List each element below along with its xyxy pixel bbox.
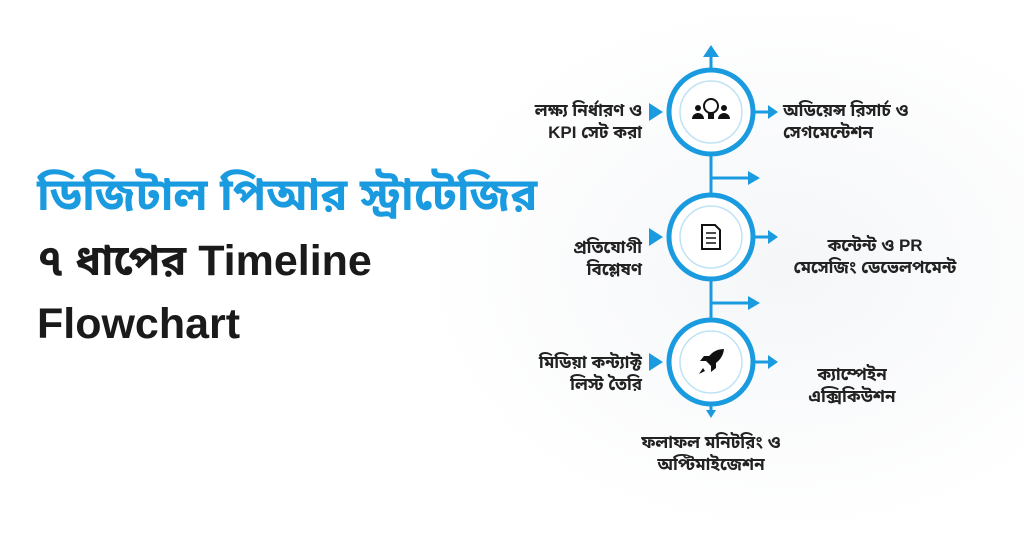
title <box>36 168 538 348</box>
label: goals: লক্ষ্য নির্ধারণ ও <box>535 101 642 120</box>
label: monitoring: অপ্টিমাইজেশন <box>657 455 765 474</box>
label: audience: অডিয়েন্স রিসার্চ ও <box>783 101 909 120</box>
circle 2 <box>669 195 753 279</box>
label: competitor: প্রতিযোগী <box>573 238 642 257</box>
label: competitor <box>573 237 642 279</box>
circle 3 <box>669 320 753 404</box>
label: media list: লিস্ট তৈরি <box>570 375 642 394</box>
label: monitoring: ফলাফল মনিটরিং ও <box>641 433 781 452</box>
background glow <box>420 0 1024 536</box>
label: audience: সেগমেন্টেশন <box>783 123 873 142</box>
label: goals: KPI সেট করা <box>548 123 642 142</box>
label: execution: ক্যাম্পেইন <box>817 365 887 384</box>
label: content <box>794 235 957 277</box>
circle 1 <box>669 70 753 154</box>
label: goals <box>534 100 642 142</box>
label: competitor: বিশ্লেষণ <box>587 260 642 279</box>
label: media list: মিডিয়া কন্ট্যাক্ট <box>539 353 642 372</box>
title: ডিজিটাল পিআর স্ট্রাটেজির <box>37 169 537 220</box>
label: content: কন্টেন্ট ও PR <box>827 236 923 255</box>
label: execution: এক্সিকিউশন <box>808 387 896 406</box>
label: media list <box>538 352 642 394</box>
label: monitoring <box>641 432 781 474</box>
label: execution <box>808 364 896 406</box>
label: content: মেসেজিং ডেভেলপমেন্ট <box>794 258 956 277</box>
title: Flowchart <box>37 300 240 348</box>
title: ৭ ধাপের Timeline <box>37 237 372 285</box>
label: audience <box>782 100 909 142</box>
